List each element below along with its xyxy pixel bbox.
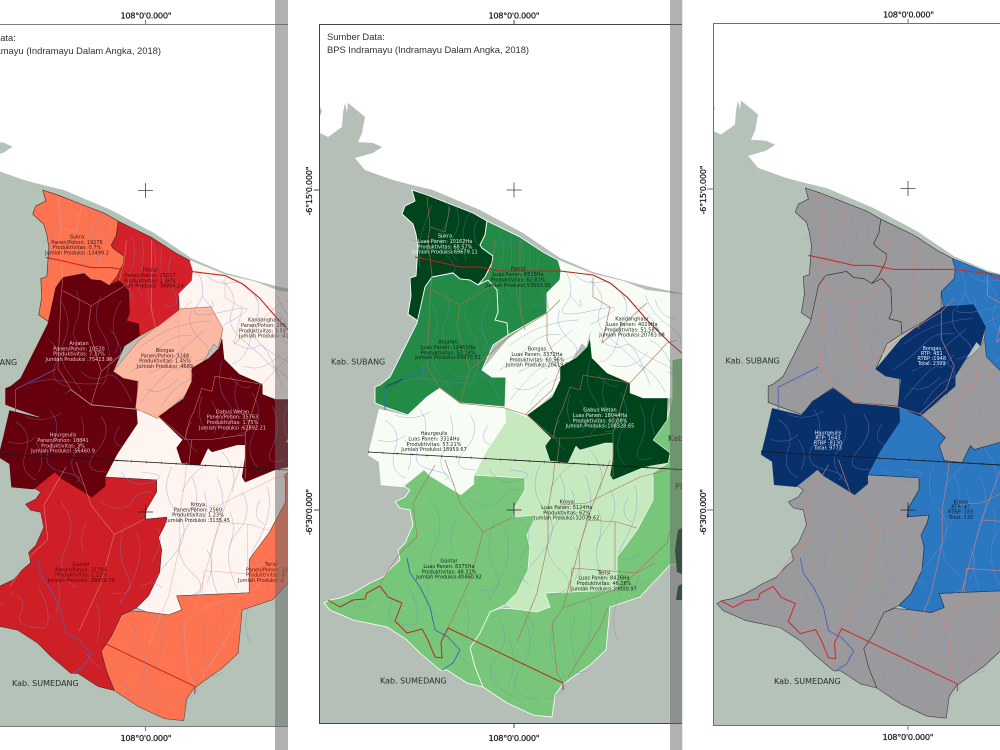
labels: Bongas: Produktivitas: 1.45% [139,359,191,365]
graticule crosshair south [138,504,153,520]
labels: Bongas: Jumlah Produksi :4689 [136,364,193,370]
labels: Kandanghaur: Produktivitas: 51.58% [605,327,660,333]
labels: Gantar: Produktivitas: 48.31% [422,569,477,575]
labels: Anjatan: Produktivitas: 7.37% [53,352,105,358]
labels: Sukra: Sukra [438,234,452,240]
panel: right map, blue choropleth of households [693,10,1000,742]
labels: Bongas: Jumlah Produksi:20419.6 [505,363,568,369]
labels: Haurgeulis: Jumlah Produksi :56460.9 [30,449,95,455]
labels: Haurgeulis: Haurgeulis [421,431,448,437]
labels: Patrol: Patrol [511,267,525,273]
graticule crosshair north [900,181,916,196]
map body, middle panel [320,34,682,723]
neighbouring place label: east: PL [675,482,685,491]
labels: Bongas: Panen/Pohon: 3248 [141,353,189,359]
neighbouring regency label: Sumedang: Kab. SUMEDANG [380,676,447,686]
labels: Kandanghaur: Produktivitas: 3.59 [239,328,286,334]
map frame, right panel [707,19,1000,730]
labels: Kroya: Kroya [560,500,574,506]
labels: Patrol: Panen/Pohon: 25017 [124,273,176,279]
map frame, middle panel [314,20,682,728]
separator strip [275,0,288,750]
labels: Terisi: Terisi [264,562,278,568]
map frame, left panel [0,20,288,731]
latitude label south: -6°30'0.000" [698,489,708,535]
labels: Gabus Wetan: Gabus Wetan [583,408,617,414]
labels: Haurgeulis: Haurgeulis [50,433,77,439]
labels: Gabus Wetan: Jumlah Produksi :62892.21 [198,425,266,431]
labels: Gabus Wetan: Produktivitas: 1.75% [207,420,259,426]
longitude label bottom: 108°0'0.000" [488,733,540,743]
labels: Haurgeulis: RTBP :8130 [814,441,842,447]
labels: Gantar: Panen/Pohon: 31786 [55,567,107,573]
labels: Anjatan: Luas Panen: 12461Ha [421,345,475,351]
labels: Gabus Wetan: Jumlah Produksi:108328.65 [565,424,634,430]
latitude label north: -6°15'0.000" [698,166,708,214]
labels: Patrol: Produktivitas: 62.81% [491,278,546,284]
labels: Sukra: Jumlah Produksi :13499.2 [44,250,109,256]
labels: Sukra: Jumlah Produksi:69679.11 [411,250,478,256]
labels: Anjatan: Panen/Pohon: 10520 [53,346,105,352]
neighbouring regency label: Subang: Kab. SUBANG [726,356,780,366]
labels: Bongas: RTBP :1948 [917,356,946,362]
labels: Patrol: Luas Panen: 8518Ha [492,272,544,278]
labels: Terisi: Panen/Pohon: 21 [246,567,288,573]
labels: Anjatan: Jumlah Produksi:64970.31 [414,355,481,361]
labels: Haurgeulis: Produktivitas: 3% [41,443,85,449]
labels: Terisi: Jumlah Produksi :2 [237,578,284,584]
labels: Anjatan: Jumlah Produksi :75413.96 [44,357,113,363]
neighbouring regency label: Subang: Kab. SUBANG [331,358,385,366]
labels: Bongas: Bongas [922,346,941,352]
neighbouring regency label: Sumedang: Kab. SUMEDANG [774,677,841,686]
labels: Gabus Wetan: Produktivitas: 60.08% [573,418,628,424]
labels: Gabus Wetan: Luas Panen: 18044Ha [573,413,627,419]
labels: Kroya: Jumlah Produksi :3135.45 [165,518,230,524]
labels: Kandanghaur: Kandanghaur [615,317,650,323]
labels: Terisi: Terisi [597,570,610,576]
labels: Terisi: Produktivitas: 46.28% [577,581,632,587]
labels: Haurgeulis: Total: 9773 [813,446,842,452]
labels: Bongas: Luas Panen: 3372Ha [511,352,563,358]
labels: Sukra: Luas Panen: 10162Ha [418,239,472,245]
labels: Bongas: Bongas [156,348,175,354]
labels: Sukra: Panen/Pohon: 19276 [51,240,103,246]
labels: Gantar: Jumlah Produksi :38459.78 [46,578,115,584]
longitude label top: 108°0'0.000" [488,10,540,20]
labels: Bongas: Bongas [528,347,547,353]
labels: Kandanghaur: Jumlah Produksi :411 [238,334,292,340]
labels: Anjatan: Anjatan [69,341,89,347]
labels: Patrol: Produktivitas: 1.46% [124,278,176,284]
labels: Gantar: Jumlah Produksi:40460.92 [415,575,482,581]
map body, right panel [693,100,1000,741]
labels: Kroya: Panen/Pohon: 2560 [174,507,222,513]
labels: Sukra: Sukra [70,234,84,240]
labels: Gantar: Luas Panen: 8375Ha [423,564,475,570]
labels: Gantar: Gantar [440,559,459,565]
labels: Anjatan: Produktivitas: 52.14% [421,350,476,356]
labels: Kroya: Produktivitas: 1.23% [172,513,224,519]
neighbouring regency label: Sumedang: Kab. SUMEDANG [12,679,79,688]
labels: Gabus Wetan: Gabus Wetan [216,409,249,415]
labels: Sukra: Produktivitas: 68.57% [418,244,473,250]
labels: Gantar: Gantar [72,562,91,568]
labels: Bongas: Produktivitas: 60.56% [510,357,565,363]
labels: Kroya: RTP: 47 [951,505,970,511]
longitude label bottom: 108°0'0.000" [120,733,172,743]
labels: Terisi: Luas Panen: 8426Ha [578,576,630,582]
neighbouring regency label: east: Kab [668,434,683,443]
longitude label bottom: 108°0'0.000" [882,732,934,742]
labels: Sukra: Produktivitas: 0.7% [53,245,101,251]
labels: Kandanghaur: Luas Panen: 4029Ha [606,322,658,328]
labels: Kandanghaur: Panen/Pohon: 265 [241,323,286,329]
labels: Haurgeulis: RTP: 1643 [815,436,841,442]
data source note: BPS Indramayu (Indramayu Dalam Angka, 2018) [327,44,529,55]
labels: Terisi: Produktivitas: 0. [246,573,287,579]
panel: left map, red choropleth of harvest by district [0,0,288,750]
labels: Haurgeulis: Produktivitas: 57.21% [407,442,462,448]
labels: Kroya: Kroya [191,502,205,508]
labels: Anjatan: Anjatan [438,340,458,346]
labels: Patrol: Jumlah Produksi :36894.14 [115,284,184,290]
labels: Kroya: RTBP :183 [948,510,973,516]
labels: Terisi: Jumlah Produksi:39000.97 [570,586,637,592]
separator strip [670,0,682,750]
map body, left panel [0,35,288,726]
labels: Kandanghaur: Jumlah Produksi:20783.08 [598,333,665,339]
labels: Gantar: Produktivitas: 1.21% [55,573,107,579]
labels: Kroya: Total: 230 [947,515,973,521]
labels: Kroya: Produktivitas: 62% [543,510,590,516]
labels: Patrol: Patrol [143,268,157,274]
longitude label top: 108°0'0.000" [883,10,934,20]
labels: Haurgeulis: Panen/Pohon: 18841 [37,438,89,444]
labels: Kroya: Kroya [954,500,968,506]
labels: Haurgeulis: Haurgeulis [815,431,842,437]
labels: Kroya: Jumlah Produksi:32079.62 [533,516,599,522]
labels: Kroya: Luas Panen: 5124Ha [541,505,592,511]
labels: Haurgeulis: Luas Panen: 3314Ha [408,436,460,442]
labels: Bongas: RTP: 451 [921,351,943,357]
latitude label north: -6°15'0.000" [304,166,314,216]
labels: Kandanghaur: Kandanghaur [248,318,282,324]
districts, right panel [693,100,1000,741]
data source note: Sumber Data: [327,31,385,42]
labels: Gabus Wetan: Panen/Pohon: 35763 [207,415,258,421]
graticule crosshair south [900,502,916,518]
labels: Patrol: Jumlah Produksi:53500.05 [484,283,551,289]
labels: Bongas: Total: 2399 [917,361,946,367]
latitude label south: -6°30'0.000" [304,489,314,535]
graticule crosshair south [506,502,522,518]
panel: middle map, green choropleth of harvest area [300,0,700,750]
graticule crosshair north [138,183,153,198]
labels: Haurgeulis: Jumlah Produksi:18959.67 [400,447,467,453]
river label: S.Punagara [385,377,404,389]
districts, middle panel [320,103,682,723]
neighbouring land, left panel [0,142,288,726]
graticule crosshair north [506,182,522,198]
longitude label top: 108°0'0.000" [120,10,172,20]
